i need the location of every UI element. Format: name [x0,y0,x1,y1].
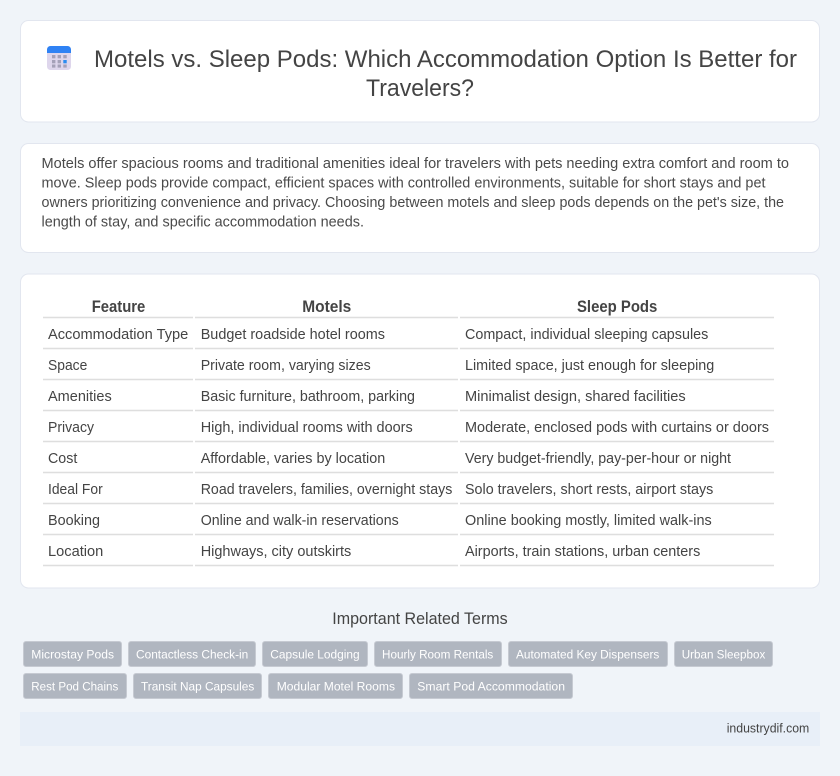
row: accommodation type: Compact, individual sleeping capsules [465,327,708,343]
tag: Urban Sleepbox [674,642,772,666]
row: location: Airports, train stations, urban centers [465,544,700,560]
row: space: Limited space, just enough for sleeping [465,358,714,374]
tag: Automated Key Dispensers [508,642,668,666]
row: cost [48,451,731,467]
panel: summary text: move. Sleep pods provide compact, efficient spaces with controlled environments, suitable for short stays and pet [42,176,766,192]
row: privacy: Moderate, enclosed pods with curtains or doors [465,420,769,436]
tag: Contactless Check-in [128,642,256,666]
row: ideal for: Solo travelers, short rests, airport stays [465,482,713,498]
row: cost: Cost [48,451,77,467]
table header row: Sleep Pods [577,298,657,316]
tag: Smart Pod Accommodation: Smart Pod Accommodation [417,679,565,693]
panel: summary text: length of stay, and specific accommodation needs. [42,214,364,230]
row: space: Private room, varying sizes [201,358,371,374]
tag: Modular Motel Rooms: Modular Motel Rooms [277,679,395,693]
tag: Rest Pod Chains [24,674,126,698]
tag: Hourly Room Rentals [374,642,502,666]
title [94,46,797,102]
tag: Hourly Room Rentals: Hourly Room Rentals [382,647,493,661]
row: amenities: Minimalist design, shared facilities [465,389,686,405]
tag: Automated Key Dispensers: Automated Key Dispensers [516,647,659,661]
title: Travelers? [366,75,474,102]
icon: calendar [47,46,71,70]
footer: industrydif.com [727,722,809,736]
row: ideal for: Ideal For [48,482,103,498]
row: privacy: High, individual rooms with doors [201,420,413,436]
tag: Capsule Lodging: Capsule Lodging [270,647,360,661]
tag: Smart Pod Accommodation [410,674,572,698]
row: booking: Online booking mostly, limited walk-ins [465,513,712,529]
row: amenities: Basic furniture, bathroom, parking [201,389,415,405]
row: booking: Booking [48,513,100,529]
row: booking: Online and walk-in reservations [201,513,399,529]
title: Motels vs. Sleep Pods: Which Accommodation Option Is Better for [94,46,797,73]
tag: Transit Nap Capsules [134,674,262,698]
panel: summary text [20,144,820,252]
tag: Modular Motel Rooms [268,674,402,698]
tag: Contactless Check-in: Contactless Check-in [136,647,248,661]
row: accommodation type: Accommodation Type [48,327,188,343]
panel: header [20,20,820,122]
row: location: Highways, city outskirts [201,544,351,560]
table header row: Motels [302,298,351,316]
heading: important related terms: Important Related Terms [332,610,508,628]
row: ideal for: Road travelers, families, overnight stays [201,482,452,498]
panel: summary text: owners prioritizing convenience and privacy. Choosing between motels and sleep pods depends on the pet's size, the [42,195,784,211]
row: privacy: Privacy [48,420,95,436]
tag: Microstay Pods: Microstay Pods [31,647,114,661]
row: accommodation type [48,327,708,343]
panel: summary text: Motels offer spacious rooms and traditional amenities ideal for travelers with pets needing extra comfort and room to [42,156,789,172]
tag: Rest Pod Chains: Rest Pod Chains [31,679,118,693]
row: location: Location [48,544,103,560]
tag: Microstay Pods [24,642,122,666]
panel: comparison table [20,274,820,588]
tag: Capsule Lodging [262,642,368,666]
row: space: Space [48,358,87,374]
row: ideal for [48,482,713,498]
row: cost: Affordable, varies by location [201,451,385,467]
row: space [48,358,714,374]
row: booking [48,513,712,529]
row: location [48,544,700,560]
footer [20,712,820,746]
tag: Transit Nap Capsules: Transit Nap Capsules [141,679,254,693]
row: cost: Very budget-friendly, pay-per-hour or night [465,451,731,467]
related term tags [24,642,772,698]
table header row: Feature [92,298,145,316]
row: privacy [48,420,769,436]
table header row [92,298,657,316]
row: accommodation type: Budget roadside hotel rooms [201,327,385,343]
row: amenities [48,389,686,405]
tag: Urban Sleepbox: Urban Sleepbox [682,647,766,661]
row: amenities: Amenities [48,389,112,405]
